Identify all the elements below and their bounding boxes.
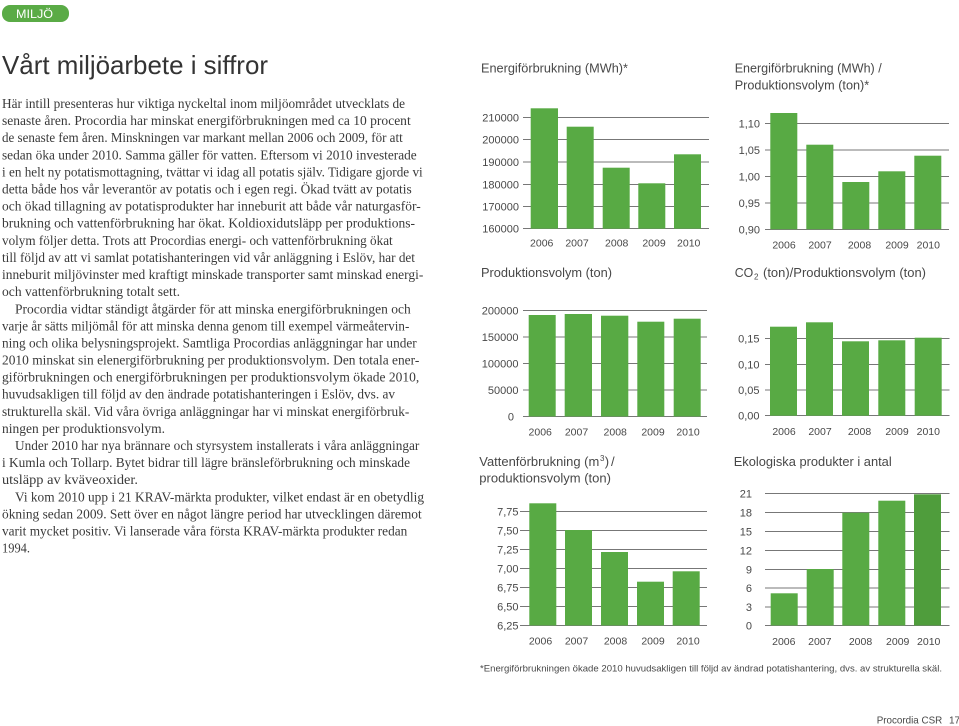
y axis labels: 6,50	[497, 601, 518, 613]
x axis labels: 2007	[808, 426, 832, 438]
y axis labels: 7,00	[497, 563, 518, 575]
x axis labels: 2008	[605, 238, 629, 250]
bars	[771, 494, 941, 626]
chart heading: Produktionsvolym (ton)	[481, 265, 612, 280]
body text: Procordia vidtar ständigt åtgärder för att minska energiförbrukningen och	[15, 302, 411, 317]
section tag: Miljö	[2, 5, 69, 22]
y axis labels: 100000	[482, 358, 518, 370]
x axis labels: 2009	[642, 238, 666, 250]
y axis labels: 12	[740, 545, 752, 557]
chart heading: Ekologiska produkter i antal	[734, 454, 892, 469]
bars	[531, 108, 701, 229]
body text: giförbrukningen och energiförbrukningen per produktionsvolym ökade 2010,	[2, 371, 419, 386]
y axis labels: 9	[746, 564, 752, 576]
body text: strukturella skäl. Vid våra övriga anläggningar har vi minskat energiförbruk-	[2, 405, 410, 420]
y axis labels: 21	[740, 489, 752, 501]
y axis labels: 0,00	[738, 411, 760, 423]
y axis labels: 160000	[482, 224, 519, 236]
y axis labels: 1,10	[739, 118, 760, 130]
x axis labels: 2007	[808, 239, 832, 251]
x axis labels: 2010	[676, 635, 700, 647]
y axis labels: 18	[740, 508, 752, 520]
chart heading: )	[605, 454, 609, 469]
x axis labels: 2008	[848, 239, 871, 251]
body text: Vi kom 2010 upp i 21 KRAV-märkta produkter, vilket endast är en obetydlig	[15, 490, 424, 505]
body text	[2, 97, 424, 556]
y axis labels: 170000	[482, 201, 519, 213]
x axis labels	[529, 427, 700, 439]
x axis labels: 2008	[604, 427, 627, 439]
body text: brukning och vattenförbrukning har ökat. Koldioxidutsläpp per produktions-	[2, 217, 415, 232]
chart heading: produktionsvolym (ton)	[479, 471, 611, 486]
y axis labels	[497, 507, 518, 632]
body text: Under 2010 har nya brännare och styrsystem installerats i våra anläggningar	[15, 439, 420, 454]
x axis labels: 2010	[917, 239, 940, 251]
x axis labels	[530, 238, 701, 250]
body text: i Kumla och Tollarp. Bytet bidrar till lägre bränsleförbrukning och minskade	[2, 456, 410, 471]
chart heading: Produktionsvolym (ton)*	[735, 77, 869, 92]
x axis labels: 2006	[529, 427, 552, 439]
x axis labels: 2006	[772, 426, 796, 438]
y axis labels: 0,15	[738, 333, 760, 345]
x axis labels: 2009	[885, 426, 909, 438]
bars	[770, 322, 942, 416]
chart heading: Energiförbrukning (MWh) /	[735, 61, 882, 76]
y axis labels	[482, 112, 519, 236]
x axis labels: 2006	[772, 239, 796, 251]
chart: Energiförbrukning (MWh)	[481, 61, 709, 250]
chart heading: (ton)/Produktionsvolym (ton)	[763, 265, 926, 280]
x axis labels: 2007	[808, 636, 832, 648]
x axis labels: 2006	[772, 636, 796, 648]
body text: senaste åren. Procordia har minskat energiförbrukningen med ca 10 procent	[2, 114, 411, 129]
body text: sedan öka under 2010. Samma gäller för vatten. Eftersom vi 2010 investerade	[2, 148, 417, 163]
chart: CO2 per produktionsvolym	[735, 265, 950, 438]
x axis labels	[772, 636, 941, 648]
y axis labels: 200000	[482, 135, 519, 147]
x axis labels: 2010	[917, 426, 940, 438]
y axis labels: 210000	[482, 112, 519, 124]
y axis labels: 150000	[482, 332, 518, 344]
body text: i en helt ny potatismottagning, tvättar vi idag all potatis själv. Tidigare gjorde vi	[2, 165, 423, 180]
body text: utsläpp av kväveoxider.	[2, 473, 138, 488]
x axis labels: 2008	[848, 426, 871, 438]
y axis labels: 0,95	[739, 198, 760, 210]
y axis labels: 50000	[488, 385, 518, 397]
x axis labels: 2006	[530, 238, 554, 250]
body text: 2010 minskat sin elenergiförbrukning per produktionsvolym. Den totala ener-	[2, 354, 420, 368]
body text: varje år sätts miljömål för att minska denna genom till exempel värmeåtervin-	[2, 319, 410, 334]
x axis labels: 2009	[885, 239, 909, 251]
chart: Vattenförbrukning per produktionsvolym	[479, 454, 707, 647]
x axis labels: 2009	[641, 635, 665, 647]
x axis labels: 2009	[886, 636, 910, 648]
y axis labels: 7,75	[497, 507, 518, 519]
y axis labels: 6,75	[497, 582, 518, 594]
y axis labels	[482, 306, 518, 424]
y axis labels	[740, 489, 752, 633]
title: Vårt miljöarbete i siffror	[2, 50, 268, 80]
y axis labels: 7,50	[497, 526, 518, 538]
y axis labels: 0	[746, 621, 752, 633]
body text: och ökad tillagning av potatisprodukter har inneburit att både vår naturgasför-	[2, 200, 421, 215]
y axis labels	[739, 118, 760, 236]
y axis labels: 6	[746, 583, 752, 595]
chart: Energiförbrukning per produktionsvolym	[735, 61, 949, 251]
chart: Ekologiska produkter i antal	[734, 454, 950, 648]
body text: huvudsakligen till följd av den ändrade potatishanteringen i Eslöv, dvs. av	[2, 388, 395, 403]
chart heading: Energiförbrukning (MWh)*	[481, 61, 628, 76]
x axis labels: 2007	[565, 427, 588, 439]
y axis labels	[738, 333, 760, 423]
x axis labels	[529, 635, 700, 647]
body text: volym följer detta. Trots att Procordias energi- och vattenförbrukning ökat	[2, 234, 393, 249]
y axis labels: 6,25	[497, 620, 518, 632]
y axis labels: 0	[508, 412, 514, 424]
x axis labels: 2008	[604, 635, 627, 647]
chart heading: CO	[735, 265, 753, 280]
x axis labels: 2010	[917, 636, 941, 648]
x axis labels: 2008	[849, 636, 872, 648]
y axis labels: 0,05	[738, 385, 760, 397]
chart heading: Vattenförbrukning (m	[479, 454, 599, 469]
body text: Här intill presenteras hur viktiga nyckeltal inom miljöområdet utvecklats de	[2, 97, 405, 112]
body text: till följd av att vi samlat potatishanteringen vid vår anläggning i Eslöv, har det	[2, 251, 415, 266]
y axis labels: 1,05	[739, 145, 760, 157]
y axis labels: 15	[740, 526, 752, 538]
x axis labels: 2007	[565, 238, 589, 250]
chart heading	[735, 61, 882, 92]
chart heading: /	[611, 454, 615, 469]
body text: ning och olika belysningsprojekt. Samtliga Procordias anläggningar har under	[2, 336, 417, 351]
bars	[529, 314, 701, 416]
footnote: *Energiförbrukningen ökade 2010 huvudsakligen till följd av ändrad potatishantering, dvs. av strukturella skäl.	[480, 664, 942, 675]
y axis labels: 190000	[482, 157, 519, 169]
y axis labels: 180000	[482, 179, 519, 191]
bars	[770, 113, 941, 229]
bars	[529, 503, 700, 626]
x axis labels: 2009	[641, 427, 665, 439]
body text: detta både hos vår leverantör av potatis och i egen regi. Ökad tvätt av potatis	[2, 180, 412, 198]
body text: 1994.	[2, 541, 30, 556]
body text: varit mycket positiv. Vi lanserade våra första KRAV-märkta produkter redan	[2, 524, 407, 539]
section tag: Miljö: MILJÖ	[16, 7, 53, 21]
y axis labels: 200000	[482, 306, 518, 318]
x axis labels	[772, 426, 940, 438]
x axis labels	[772, 239, 940, 251]
chart heading	[479, 454, 615, 486]
page footer: Procordia CSR	[877, 714, 943, 726]
x axis labels: 2007	[565, 635, 588, 647]
body text: de senaste fem åren. Minskningen var markant mellan 2006 och 2009, för att	[2, 131, 403, 146]
body text: och vattenförbrukning totalt sett.	[2, 285, 180, 300]
body text: inneburit miljövinster med kraftigt minskade transporter samt minskad energi-	[2, 268, 424, 283]
chart heading: 3	[600, 454, 605, 463]
y axis labels: 1,00	[739, 172, 760, 184]
body text: ningen per produktionsvolym.	[2, 422, 165, 437]
x axis labels: 2010	[677, 238, 701, 250]
chart: Produktionsvolym	[481, 265, 707, 439]
x axis labels: 2006	[529, 635, 552, 647]
body text: ökning sedan 2009. Sett över en något längre period har utvecklingen däremot	[2, 507, 422, 522]
y axis labels: 0,90	[739, 224, 760, 236]
y axis labels: 3	[746, 602, 752, 614]
x axis labels: 2010	[676, 427, 700, 439]
chart heading: 2	[754, 272, 759, 282]
y axis labels: 7,25	[497, 544, 518, 556]
y axis labels: 0,10	[738, 359, 760, 371]
